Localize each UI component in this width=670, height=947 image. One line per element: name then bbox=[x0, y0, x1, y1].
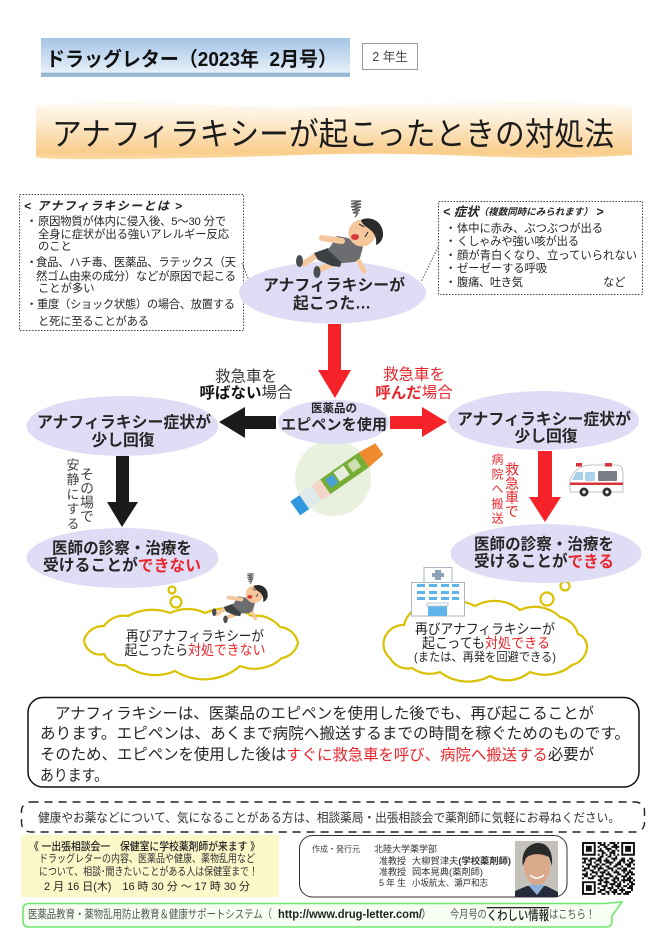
panel: symptoms: < 症状（複数同時にみられます） > bbox=[443, 205, 604, 219]
panel: definition of anaphylaxis: ・ bbox=[26, 299, 37, 311]
panel: school consultation session: ドラッグレターの内容、医薬品や健康、薬物乱用など bbox=[39, 851, 255, 865]
panel: school consultation session bbox=[21, 835, 279, 897]
panel: authors: 准教授 bbox=[379, 866, 406, 877]
cloud: cannot cope: 再びアナフィラキシーが bbox=[126, 628, 264, 644]
panel: key message: そのため、エピペンを使用した後はすぐに救急車を呼び、病院へ搬送する必要が bbox=[40, 746, 594, 764]
callout: website link: ） bbox=[421, 908, 432, 921]
label: ambulance called bbox=[375, 366, 453, 402]
panel: authors: 北陸大学薬学部 bbox=[374, 843, 437, 854]
panel: authors: 准教授 bbox=[379, 855, 406, 866]
panel: definition of anaphylaxis: のこと bbox=[38, 240, 72, 253]
oval: symptoms recover, left bbox=[26, 396, 218, 456]
oval: anaphylaxis occurred: アナフィラキシーが bbox=[263, 276, 405, 294]
panel: definition of anaphylaxis: ・ bbox=[26, 216, 37, 228]
cloud: can cope bbox=[384, 600, 587, 682]
label: rest on the spot bbox=[64, 458, 95, 530]
panel: symptoms: 顔が青白くなり、立っていられない bbox=[457, 248, 637, 262]
title banner: アナフィラキシーが起こったときの対処法 bbox=[52, 116, 614, 152]
panel: symptoms: ・ bbox=[445, 250, 456, 262]
panel: school consultation session: について、相談･聞きたいことがある人は保健室まで！ bbox=[39, 864, 258, 878]
oval: cannot receive care bbox=[26, 528, 218, 588]
label: transport by ambulance bbox=[490, 453, 520, 525]
label: transport by ambulance: 病院へ搬送 bbox=[490, 453, 504, 525]
panel: symptoms: ・ bbox=[445, 277, 456, 289]
panel: symptoms bbox=[421, 202, 642, 294]
panel: definition of anaphylaxis bbox=[20, 194, 254, 330]
newsletter header bar: ドラッグレター（2023年 2月号） bbox=[46, 47, 337, 71]
icon: collapsed person bbox=[296, 201, 383, 278]
panel: symptoms: ・ bbox=[445, 263, 456, 275]
oval: use EpiPen: 医薬品の bbox=[311, 401, 357, 415]
panel: authors: 作成・発行元 bbox=[312, 844, 360, 854]
oval: symptoms recover, right: 少し回復 bbox=[514, 426, 578, 446]
panel: key message: あります。 bbox=[40, 766, 108, 784]
label: no ambulance called: 呼ばない場合 bbox=[199, 384, 293, 402]
thought bubbles, left bbox=[168, 586, 182, 608]
panel: school consultation session: 《 一出張相談会一 保健室に学校薬剤師が来ます 》 bbox=[29, 839, 260, 853]
callout: website link: 医薬品教育・薬物乱用防止教育＆健康サポートシステム（ bbox=[28, 907, 272, 921]
icon: EpiPen autoinjector bbox=[290, 440, 385, 516]
callout: website link bbox=[23, 902, 622, 927]
cloud: can cope: 再びアナフィラキシーが bbox=[415, 621, 555, 637]
icon: hospital bbox=[412, 568, 464, 616]
icon: small collapsed person bbox=[212, 574, 268, 623]
panel: key message bbox=[28, 698, 639, 787]
panel: symptoms: 体中に赤み、ぶつぶつが出る bbox=[457, 221, 603, 235]
panel: definition of anaphylaxis: 重度（ショック状態）の場合、放置する bbox=[37, 297, 235, 311]
panel: definition of anaphylaxis: 然ゴム由来の成分）などが原因で起こる bbox=[36, 269, 236, 283]
cloud: cannot cope: 起こったら対処できない bbox=[124, 642, 266, 658]
cloud: can cope: 起こっても対処できる bbox=[422, 635, 550, 651]
cloud: cannot cope bbox=[84, 609, 298, 679]
panel: consultation note: 健康やお薬などについて、気になることがある方は、相談薬局・出張相談会で薬剤師に気軽にお尋ねください。 bbox=[38, 810, 620, 825]
newsletter header bar bbox=[41, 38, 350, 77]
panel: key message: アナフィラキシーは、医薬品のエピペンを使用した後でも、再び起こることが bbox=[55, 704, 594, 722]
panel: authors: 5年生 bbox=[379, 877, 406, 888]
grade label bbox=[362, 44, 418, 70]
oval: anaphylaxis occurred: 起こった… bbox=[293, 294, 371, 312]
oval: can receive care: 医師の診察・治療を bbox=[474, 534, 614, 554]
panel: symptoms: ・ bbox=[445, 223, 456, 235]
label: ambulance called: 呼んだ場合 bbox=[375, 384, 453, 402]
label: no ambulance called: 救急車を bbox=[215, 368, 277, 386]
panel: symptoms: ・ bbox=[445, 236, 456, 248]
panel: definition of anaphylaxis: 全身に症状が出る強いアレルギー反応 bbox=[38, 227, 229, 241]
oval: symptoms recover, left: 少し回復 bbox=[91, 430, 155, 450]
icon: ambulance bbox=[570, 463, 623, 496]
panel: definition of anaphylaxis: ことが多い bbox=[38, 281, 94, 295]
label: no ambulance called bbox=[199, 368, 293, 402]
panel: definition of anaphylaxis: ・ bbox=[26, 257, 37, 269]
photo: author portrait bbox=[515, 841, 558, 897]
panel: definition of anaphylaxis: < アナフィラキシーとは > bbox=[24, 199, 182, 213]
icon: QR code bbox=[582, 842, 635, 895]
oval: anaphylaxis occurred bbox=[239, 262, 426, 324]
grade label: 2 年生 bbox=[372, 50, 408, 64]
callout: website link: http://www.drug-letter.com/ bbox=[278, 909, 423, 921]
label: rest on the spot: 安静にする bbox=[64, 458, 80, 530]
panel: authors: 小坂航太、瀬戸和志 bbox=[412, 877, 488, 888]
panel: symptoms: 腹痛、吐き気 bbox=[457, 275, 523, 289]
panel: symptoms: くしゃみや強い咳が出る bbox=[457, 234, 579, 248]
label: transport by ambulance: 救急車で bbox=[504, 462, 520, 518]
oval: use EpiPen bbox=[278, 400, 389, 444]
panel: school consultation session: 2 月 16 日(木) 16 時 30 分 ～ 17 時 30 分 bbox=[44, 880, 250, 893]
panel: authors: 岡本晃典(薬剤師) bbox=[412, 866, 483, 877]
thought bubbles, right bbox=[540, 582, 570, 606]
oval: use EpiPen: エピペンを使用 bbox=[281, 416, 387, 434]
panel: consultation note bbox=[22, 802, 644, 832]
oval: symptoms recover, right: アナフィラキシー症状が bbox=[457, 410, 631, 428]
label: ambulance called: 救急車を bbox=[383, 366, 445, 384]
panel: definition of anaphylaxis: 食品、ハチ毒、医薬品、ラテックス（天 bbox=[36, 256, 236, 269]
arrow: black down bbox=[107, 456, 138, 527]
oval: can receive care bbox=[450, 524, 642, 583]
panel: symptoms: ゼーゼーする呼吸 bbox=[457, 262, 547, 275]
arrow: red down bbox=[529, 451, 561, 522]
cloud: can cope: (または、再発を回避できる) bbox=[414, 650, 556, 664]
panel: authors bbox=[300, 836, 567, 897]
oval: symptoms recover, right bbox=[448, 391, 639, 450]
oval: can receive care: 受けることができる bbox=[474, 552, 614, 570]
panel: key message: あります。エピペンは、あくまで病院へ搬送するまでの時間を稼ぐためのものです。 bbox=[40, 724, 630, 742]
label: rest on the spot: その場で bbox=[79, 467, 95, 523]
panel: definition of anaphylaxis: 原因物質が体内に侵入後、5～30 分で bbox=[38, 214, 226, 228]
panel: authors: 大柳賀津夫(学校薬剤師) bbox=[412, 855, 511, 866]
panel: symptoms: など bbox=[603, 276, 626, 289]
arrow: red right bbox=[390, 407, 447, 437]
oval: symptoms recover, left: アナフィラキシー症状が bbox=[37, 412, 211, 432]
arrow: red down to EpiPen bbox=[318, 324, 351, 398]
title banner bbox=[36, 102, 632, 159]
callout: website link: 今月号のくわしい情報はこちら！ bbox=[450, 907, 595, 922]
arrow: black left bbox=[219, 407, 276, 438]
panel: definition of anaphylaxis: と死に至ることがある bbox=[38, 314, 149, 328]
oval: cannot receive care: 医師の診察・治療を bbox=[52, 538, 192, 558]
oval: cannot receive care: 受けることができない bbox=[43, 556, 201, 574]
